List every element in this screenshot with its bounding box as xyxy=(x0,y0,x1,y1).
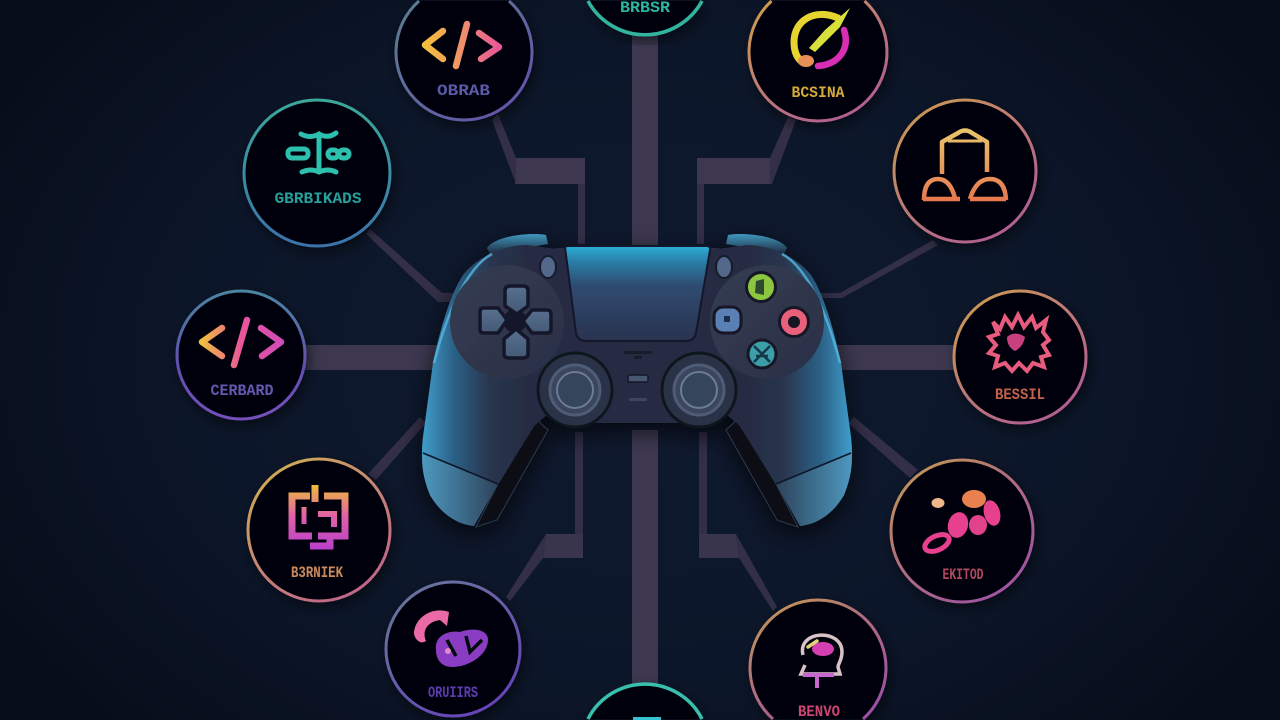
icon: code brackets xyxy=(425,24,499,66)
d-pad xyxy=(480,286,551,358)
label: code left: CERBARD xyxy=(210,382,274,400)
action button green xyxy=(746,272,776,302)
node: lower right pink xyxy=(891,460,1033,602)
label: pen top right: BCSINA xyxy=(792,84,845,102)
small oval button left xyxy=(540,256,556,278)
node: pen top right xyxy=(749,1,887,121)
node: code top left xyxy=(396,1,532,120)
label: burst right: BESSIL xyxy=(995,386,1045,404)
icon: brush and ring xyxy=(794,8,850,67)
action button teal xyxy=(748,340,776,368)
action button blue xyxy=(714,307,741,333)
right inner grip xyxy=(726,420,798,527)
icon: spiky burst xyxy=(989,315,1049,371)
node: burst right xyxy=(954,291,1086,423)
left inner grip xyxy=(476,420,548,527)
icon: head with brain xyxy=(801,635,842,688)
right shoulder button xyxy=(726,234,787,254)
node: head bottom right xyxy=(750,600,886,720)
touch pad xyxy=(565,246,710,341)
left grip end cap xyxy=(422,453,498,526)
connector lines xyxy=(300,34,958,686)
right thumbstick xyxy=(662,353,736,427)
label: teal blueprint: GBRBIKADS xyxy=(274,190,362,208)
small oval button right xyxy=(716,256,732,278)
label: lower right pink: EKITOD xyxy=(942,566,984,584)
icon: teal node diagram xyxy=(288,133,349,172)
icon: pink pieces xyxy=(922,490,1003,555)
icon: code brackets xyxy=(202,320,281,365)
action button pink xyxy=(780,308,808,336)
right face plate xyxy=(710,265,824,379)
node: top centre xyxy=(588,0,702,35)
node: teal blueprint xyxy=(244,100,390,246)
right grip xyxy=(709,245,852,526)
icon: pink and purple shapes xyxy=(414,610,488,667)
label: lower left modules: B3RNIEK xyxy=(291,564,343,582)
node: code left xyxy=(177,291,305,419)
node: bottom centre xyxy=(588,684,702,720)
icon: interlocking blocks xyxy=(292,485,345,546)
node: lower left modules xyxy=(248,459,390,601)
game controller xyxy=(422,234,852,527)
left thumbstick xyxy=(538,353,612,427)
node: bottom left purple xyxy=(386,582,520,716)
left face plate xyxy=(450,265,564,379)
node: people right xyxy=(894,100,1036,242)
right grip end cap xyxy=(776,453,852,526)
icon: bottom centre tip xyxy=(633,717,661,720)
centre buttons xyxy=(624,351,652,401)
right edge highlight xyxy=(782,254,840,363)
left shoulder button xyxy=(487,234,548,254)
left grip xyxy=(422,245,565,526)
label: bottom left purple: ORUIIRS xyxy=(428,684,478,702)
controller centre body xyxy=(555,248,719,423)
label: code top left: OBRAB xyxy=(437,82,490,100)
left edge highlight xyxy=(434,254,492,363)
grip divider lines xyxy=(423,453,851,484)
icon: board and people xyxy=(923,130,1006,200)
